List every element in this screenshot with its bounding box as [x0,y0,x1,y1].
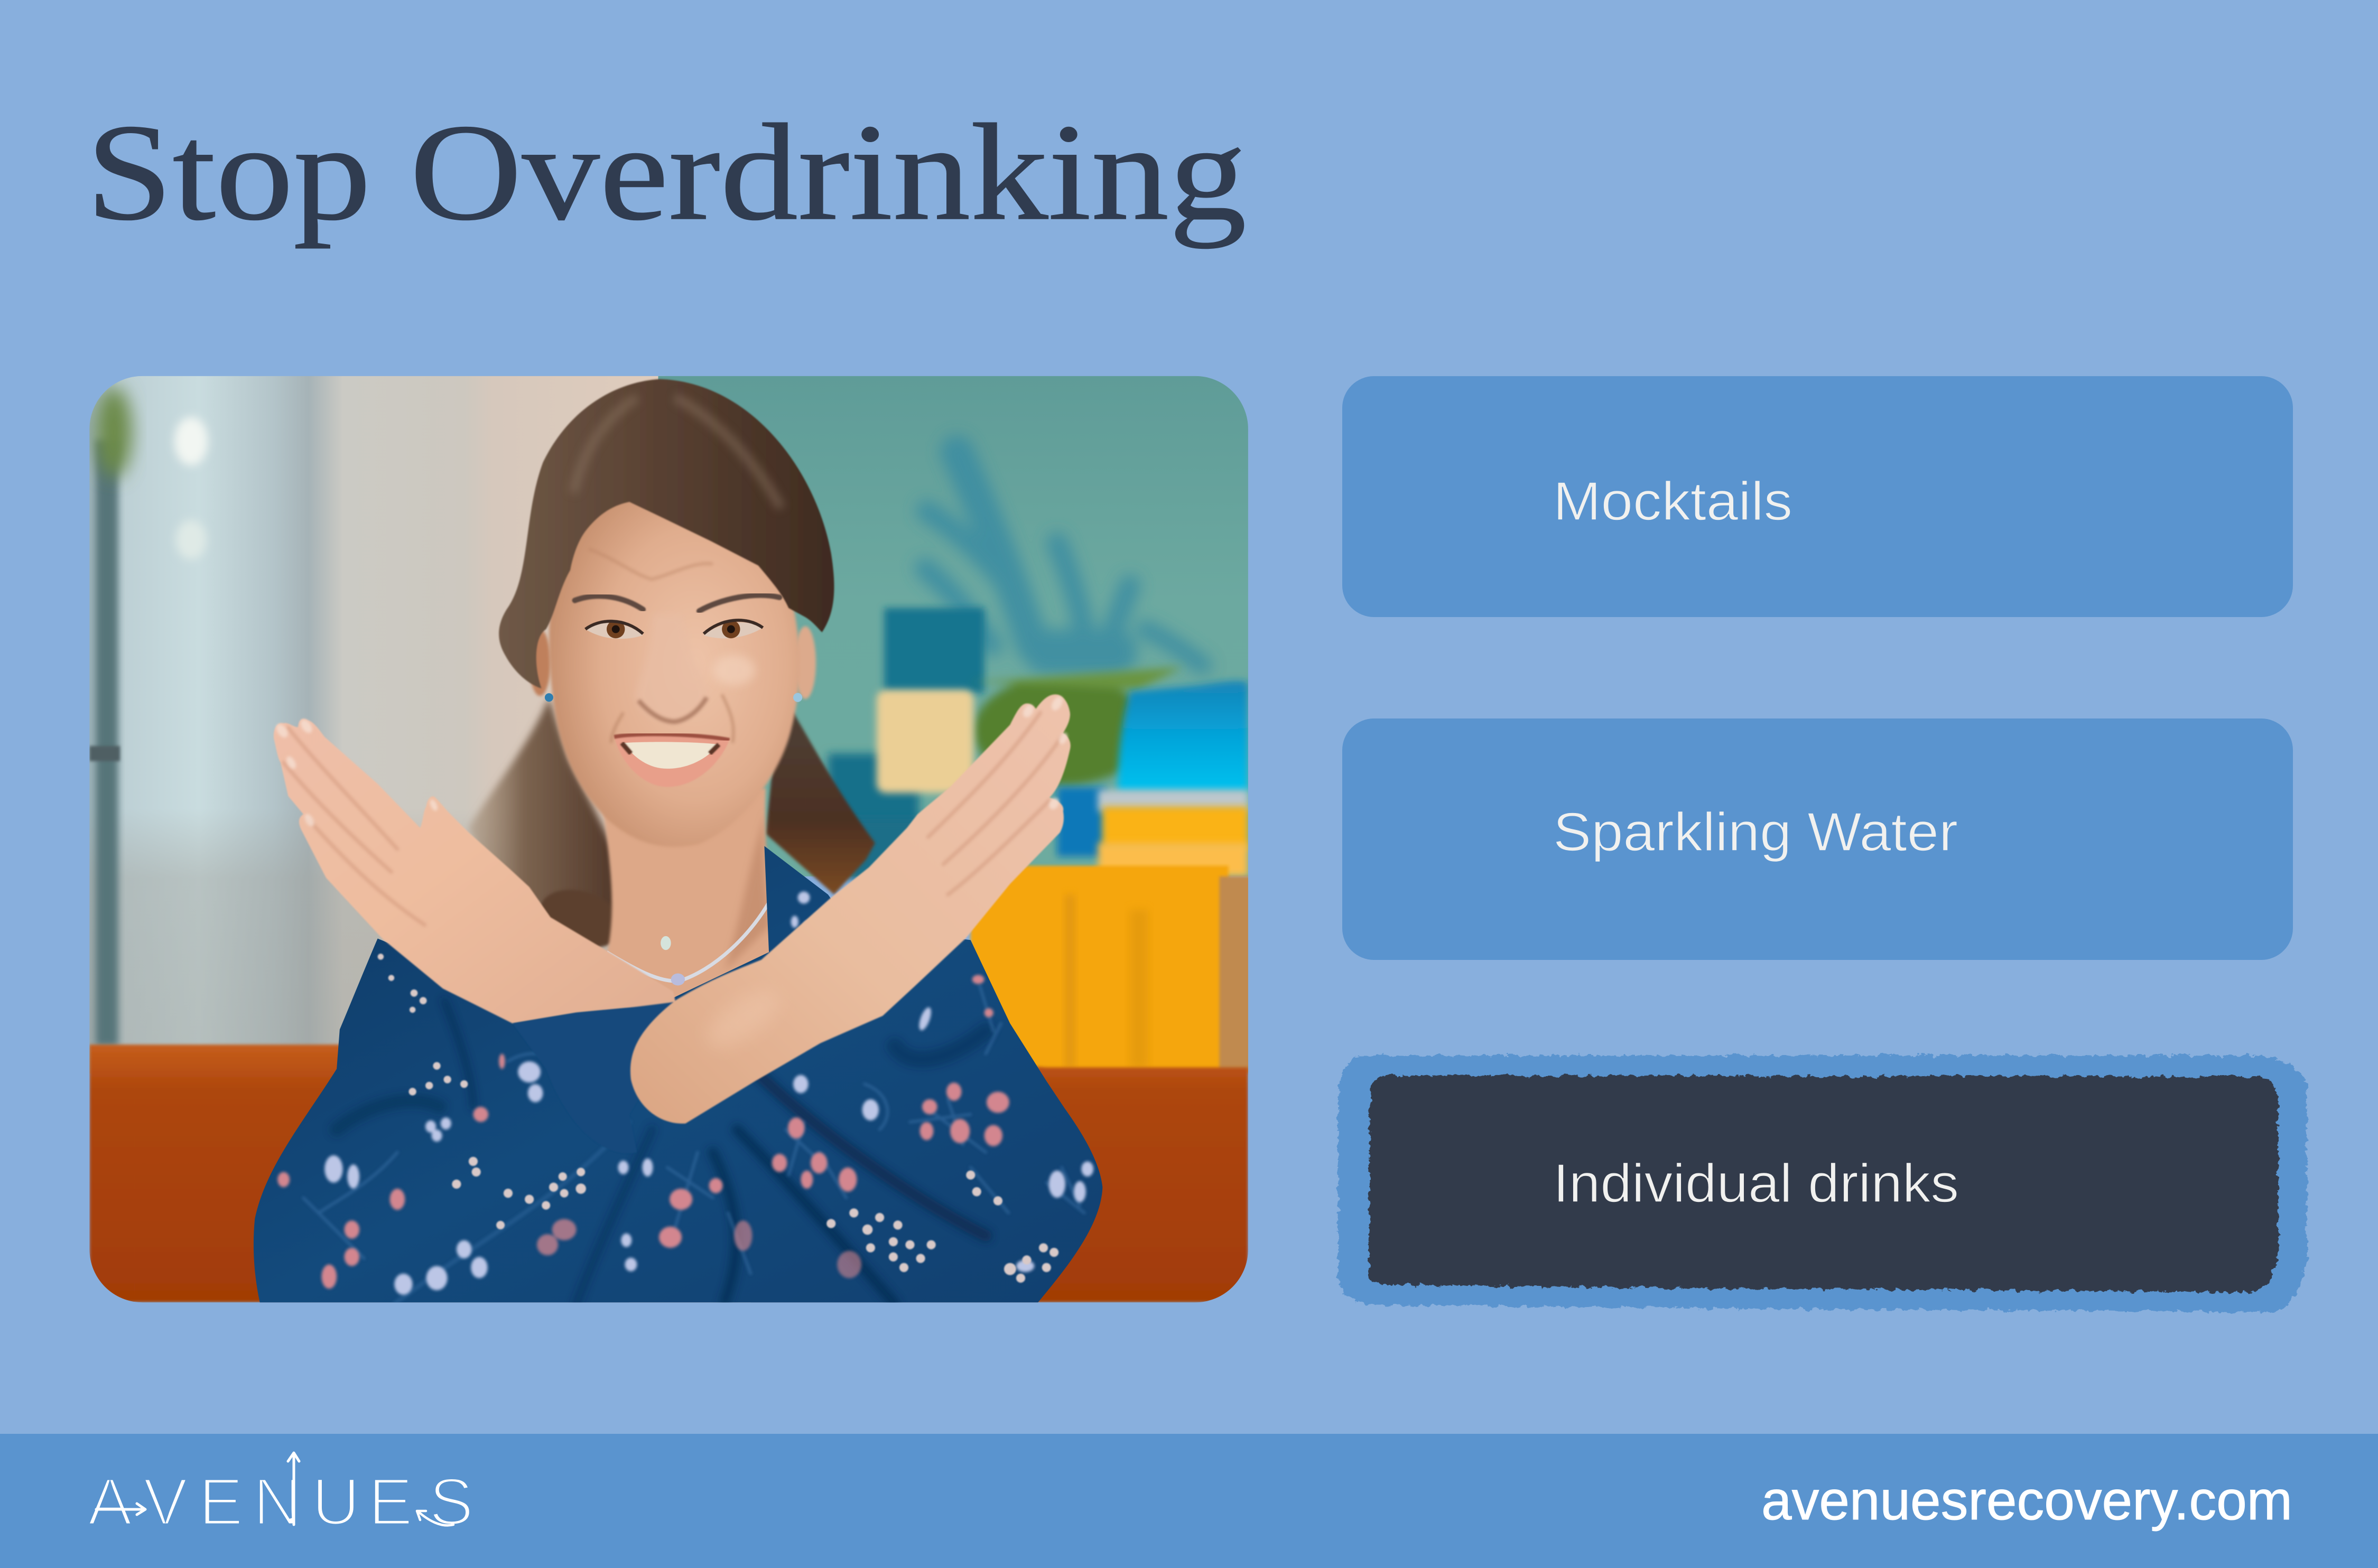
nose [635,614,708,722]
green plant [971,667,1183,786]
knuckle highlight [698,979,788,1058]
hair highlight [573,397,781,508]
website address: avenuesrecovery.com [1761,1470,2292,1532]
nails on right hand [274,717,439,828]
logo arrows [96,1453,453,1525]
hair bun over shoulder [541,890,611,949]
face and head [499,379,834,847]
long hair behind shoulders: right side [766,710,875,894]
card: Mocktails [1342,376,2293,617]
blouse highlights and sprigs [303,985,1084,1304]
forehead wrinkles [589,549,713,579]
mouth [614,735,729,787]
card: Sparkling Water: Sparkling Water [1553,801,1958,862]
nails on left hand [1021,695,1069,811]
card: Individual drinks, highlighted with rough brush edge [1338,1056,2307,1312]
title: Stop Overdrinking [86,96,1247,249]
woman's left hand and forearm [630,694,1071,1124]
card: Sparkling Water [1342,718,2293,960]
face shape [549,482,800,847]
eyebrows [575,596,643,610]
card: Mocktails: Mocktails [1553,471,1792,531]
footer bar [0,1434,2378,1568]
earrings [545,693,553,702]
blouse [254,846,1102,1307]
finger separations on right hand [284,728,425,925]
background seen beneath crossed arms [629,1302,750,1303]
blouse pattern: pink flowers [277,975,1009,1289]
neck and necklace [600,788,779,1019]
upper hair [499,379,834,688]
finger separations on left hand [928,713,1062,894]
long hair behind shoulders: light left side [467,698,614,909]
eyes [586,623,643,639]
plant shadow on wall [925,452,1203,666]
card: Individual drinks, highlighted with rough brush edge: Individual drinks [1553,1153,1959,1214]
blouse pattern: small beige dots [378,954,1058,1283]
blouse fold shadows [337,1001,986,1304]
photo: woman crossing her arms in a stop gesture [89,376,1253,1307]
woman's right hand and forearm [274,717,676,1023]
blouse cuff [513,1002,682,1153]
blouse pattern: pale blossoms [324,892,1093,1295]
ears [530,629,551,696]
photo background: curtains, wall, furniture and sofa [89,376,1253,1302]
logo: AVENUES wordmark with arrows: AVENUES [88,1464,473,1539]
